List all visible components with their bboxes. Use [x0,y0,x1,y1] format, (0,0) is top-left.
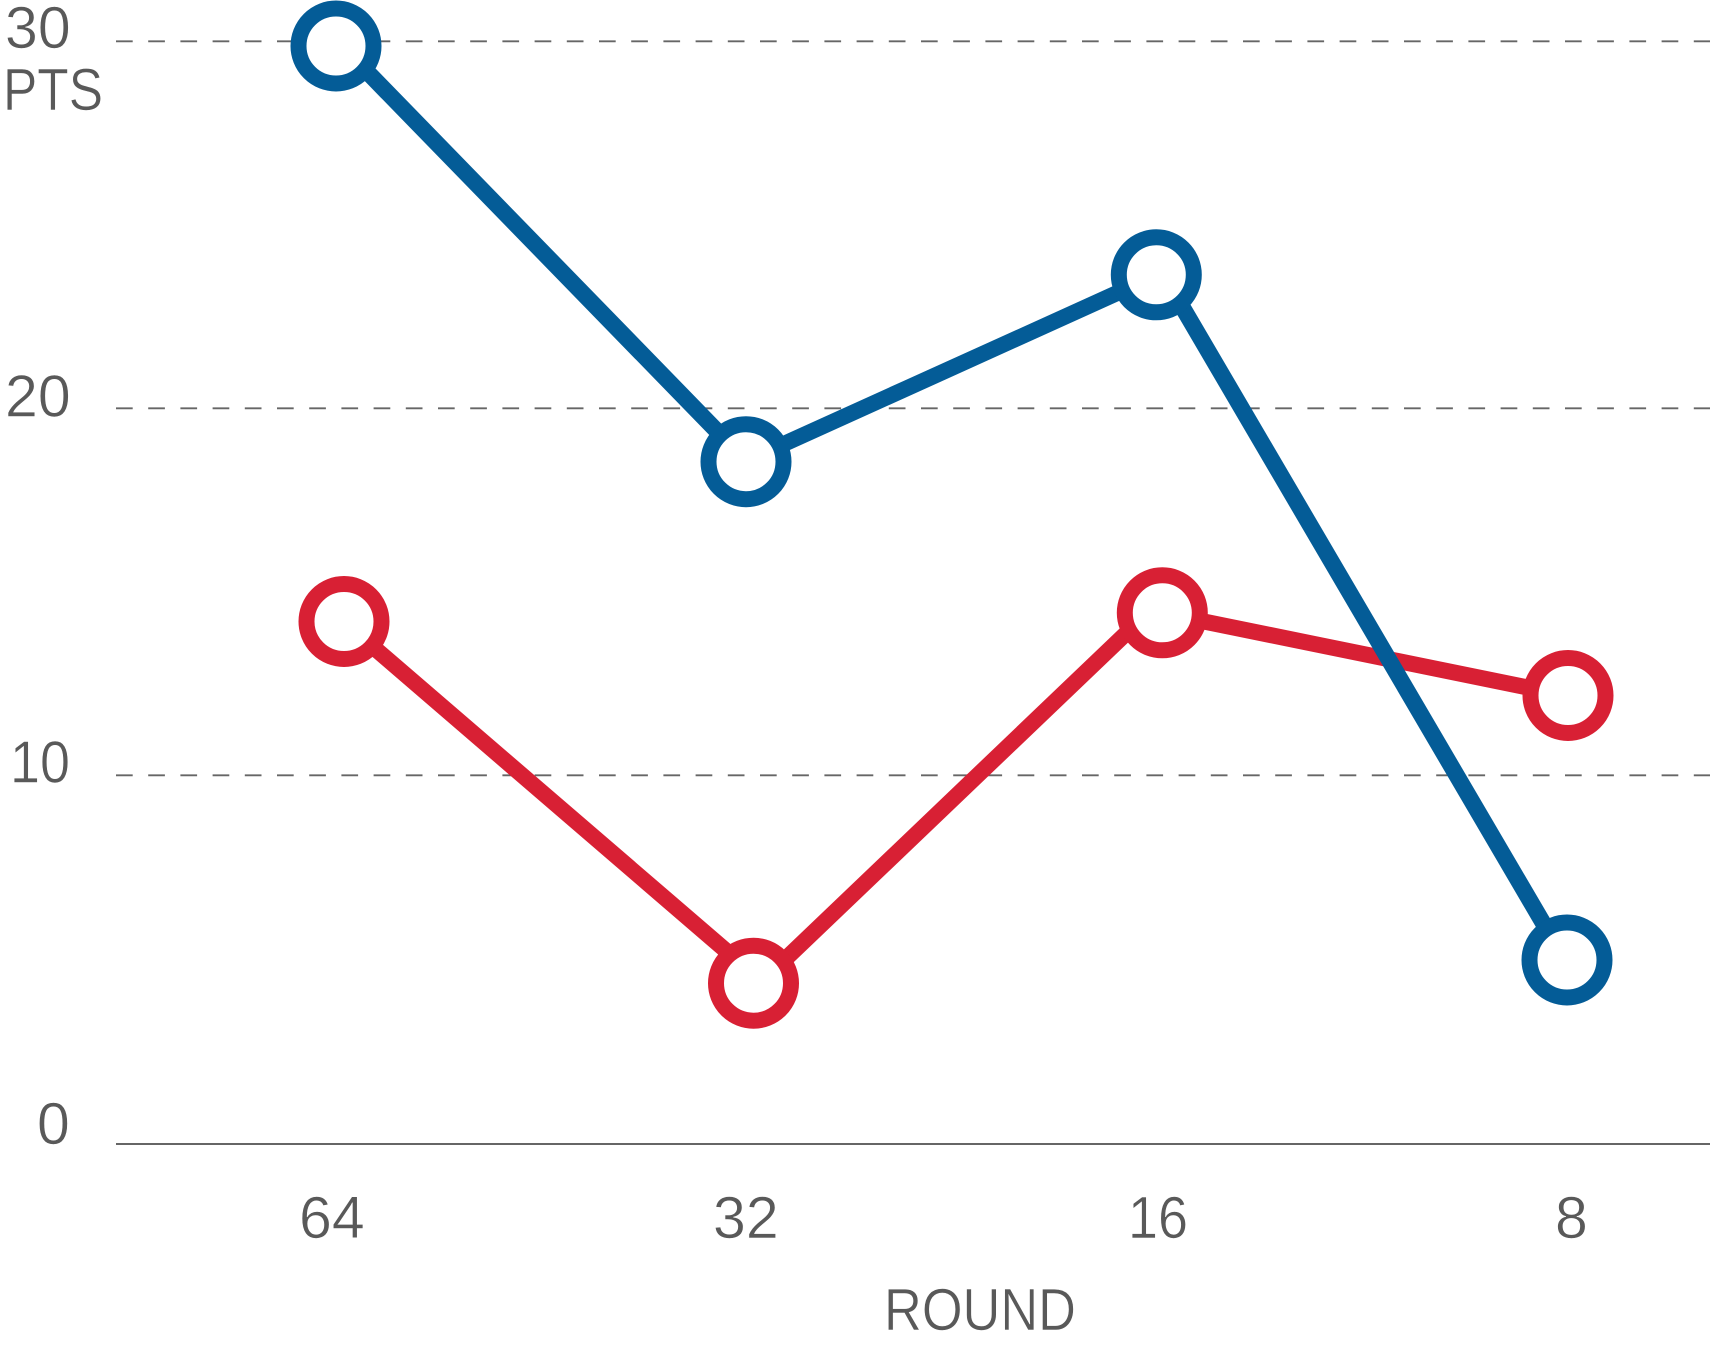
x-axis labels: 32 [713,1185,779,1251]
blue series [298,8,1604,998]
x-axis labels: 16 [1128,1185,1188,1251]
red series [306,575,1606,1021]
x-axis labels [299,1185,1588,1251]
gridlines [116,41,1710,1144]
y-axis labels: 0 [37,1091,70,1157]
y-axis labels: PTS [3,57,103,123]
x-axis labels: 64 [299,1185,365,1251]
x-axis labels: 8 [1555,1185,1588,1251]
y-axis labels: 10 [10,730,70,796]
x-axis title: ROUND [884,1277,1076,1343]
y-axis labels [3,0,103,1157]
y-axis labels: 20 [5,364,71,430]
